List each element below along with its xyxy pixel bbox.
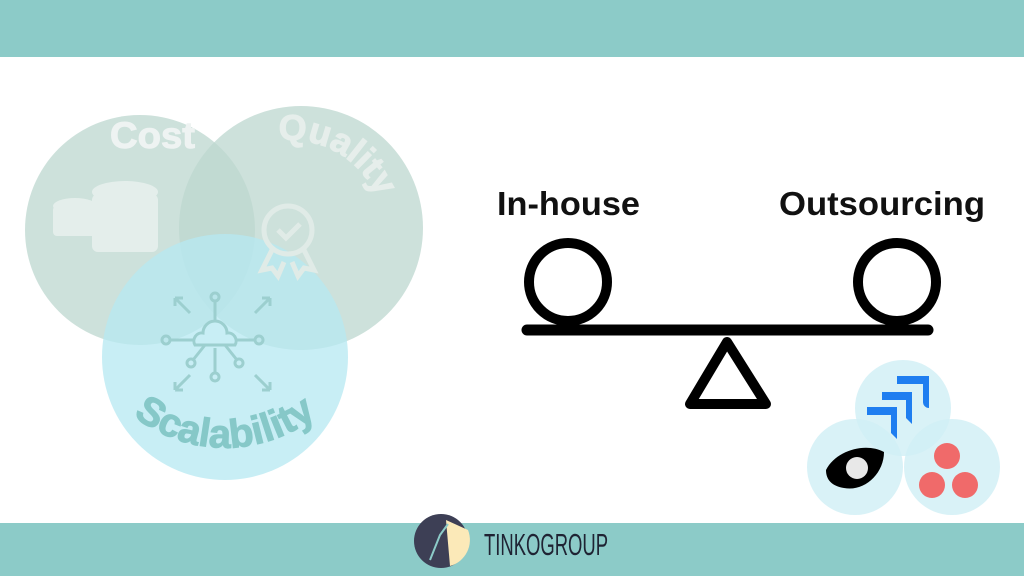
heading: in-house: In-house	[497, 185, 640, 222]
icon: asana	[919, 443, 978, 498]
seesaw	[527, 243, 936, 404]
tool logos	[807, 360, 1000, 515]
label: cost: Cost	[110, 115, 195, 156]
label: scalability: Scalability	[136, 396, 312, 449]
label: quality: Quality	[280, 114, 395, 192]
heading: outsourcing: Outsourcing	[779, 185, 985, 222]
bottom bar	[0, 523, 1024, 576]
icon: coins	[53, 181, 158, 252]
icon: badge	[262, 206, 314, 276]
icon: jira	[867, 376, 929, 439]
logo: tinkogroup	[414, 514, 608, 568]
top bar	[0, 0, 1024, 57]
venn diagram	[25, 106, 423, 480]
icon: eye	[826, 448, 884, 489]
logo: tinkogroup: TINKOGROUP	[484, 527, 608, 562]
icon: cloud network	[162, 293, 270, 390]
